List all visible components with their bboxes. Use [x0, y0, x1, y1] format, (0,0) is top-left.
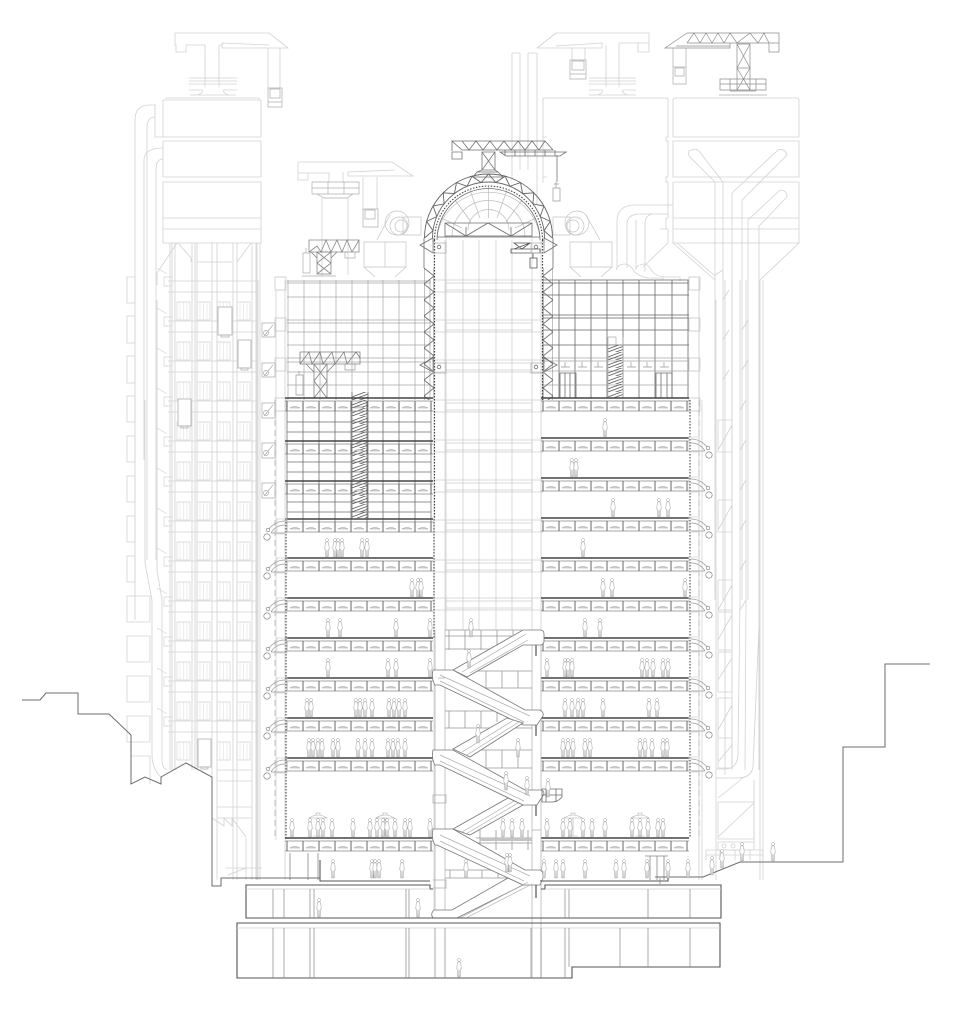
- atrium floor bands: [434, 280, 543, 610]
- risers: [699, 277, 763, 880]
- people right wing: [545, 418, 687, 757]
- escalator flight G: [432, 878, 523, 918]
- crane base: [189, 78, 237, 95]
- escalator cabin: [542, 789, 562, 802]
- crown: [473, 172, 503, 177]
- main glazing left upper: [275, 277, 431, 411]
- ground outline: [22, 664, 930, 886]
- tank two: [673, 98, 799, 280]
- atrium: [434, 237, 543, 918]
- mezzanine balustrades: [445, 630, 532, 878]
- people ground hall: [290, 818, 665, 837]
- shaft bracing: [157, 243, 251, 285]
- tank one: [543, 98, 668, 267]
- escalator flight E: [453, 798, 523, 835]
- diagonal panels: [718, 420, 754, 850]
- mid-left inner truss: [296, 352, 360, 398]
- right crane one: [537, 33, 649, 95]
- escalators: [432, 630, 562, 918]
- outer service boxes: [127, 277, 150, 784]
- right stair: [608, 337, 623, 398]
- dome inner dotted ring: [434, 186, 542, 240]
- base bolts: [722, 844, 726, 848]
- tower curved pipes: [135, 105, 163, 620]
- people on escalators: [467, 618, 550, 797]
- escalator posts: [535, 645, 537, 898]
- right crane two: [665, 33, 779, 95]
- atrium glazing: [434, 237, 541, 918]
- crane platform: [312, 182, 359, 198]
- dotted facades: [286, 400, 690, 838]
- basement: [237, 885, 721, 978]
- right tanks: [543, 98, 799, 770]
- right bracket arms: [689, 437, 712, 778]
- Y-shaped risers: [688, 149, 787, 770]
- lower core: [433, 630, 541, 978]
- plant room left: [364, 211, 421, 277]
- lobby floor left: [320, 860, 668, 881]
- lower shaft: [212, 770, 262, 878]
- umbrella tables: [309, 813, 649, 836]
- left wing floors: [285, 398, 433, 851]
- crane cabin: [363, 209, 378, 227]
- small riser diagonals: [715, 270, 748, 610]
- outer service pipes: [145, 300, 167, 778]
- central crane: [452, 141, 566, 201]
- escalator flight D: [432, 750, 544, 805]
- right wing floors: [541, 398, 689, 851]
- people lobby and basement: [317, 842, 775, 977]
- sub crane: [511, 243, 540, 268]
- roof truss left: [302, 240, 359, 276]
- left upper office grid: [287, 403, 431, 523]
- escalator flight A: [453, 630, 544, 677]
- bracket row: [561, 362, 669, 367]
- dome: [424, 172, 552, 268]
- lift cars: [178, 307, 251, 769]
- lower basement: [237, 923, 720, 978]
- left bracket arms: [264, 519, 287, 779]
- large curved ducts: [616, 205, 680, 281]
- left service tower: [127, 98, 262, 880]
- doors: [560, 373, 672, 398]
- lobby doors: [290, 853, 668, 884]
- escalator flight C: [453, 718, 523, 757]
- left stair: [352, 392, 368, 518]
- dome truss: [424, 174, 552, 238]
- main glazing right upper: [543, 277, 700, 411]
- right tall flues: [512, 53, 537, 205]
- right plant room: [553, 211, 612, 277]
- side truss columns: [420, 238, 557, 518]
- right ground and retaining walls: [655, 664, 930, 877]
- right service tower: [699, 270, 763, 880]
- tower tank: [163, 98, 261, 243]
- shaft floors: [157, 268, 258, 760]
- upper basement: [246, 885, 721, 918]
- dome ribs: [437, 186, 540, 237]
- people left wing: [305, 538, 432, 757]
- shaft columns: [170, 243, 260, 880]
- left tower crane: [175, 33, 288, 107]
- escalator flight F: [432, 829, 543, 885]
- left facade columns: [256, 243, 702, 880]
- mid-left roof crane: [298, 162, 413, 276]
- left upper bracket icons: [262, 323, 275, 498]
- core columns: [433, 630, 541, 978]
- escalator flight B: [432, 670, 543, 725]
- dome lower truss: [437, 223, 540, 237]
- hanging cabin: [268, 88, 282, 107]
